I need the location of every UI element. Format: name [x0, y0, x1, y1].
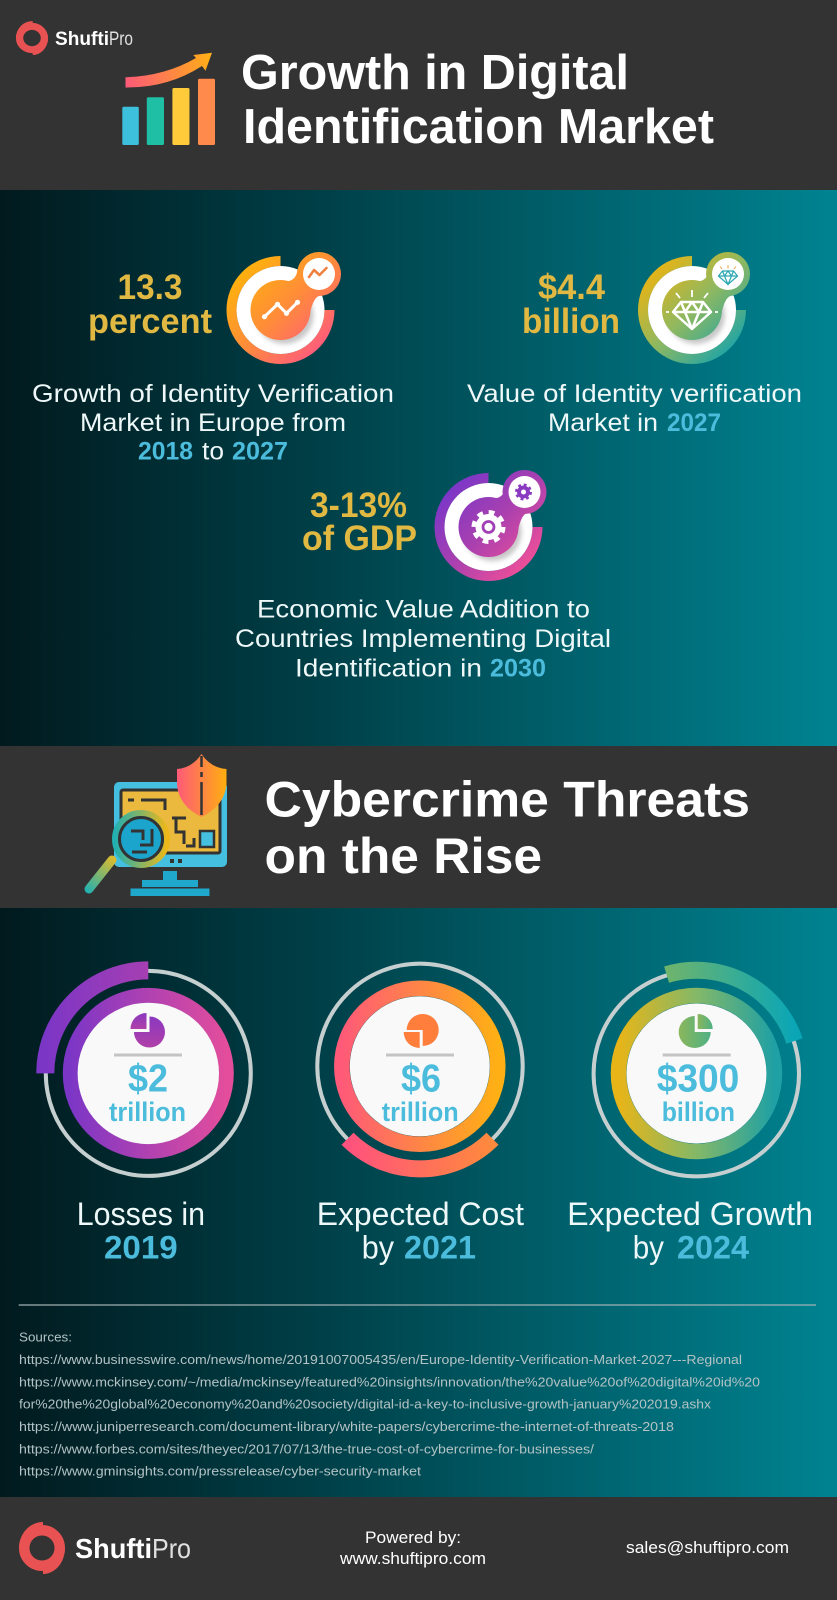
- text: growth description: 2027: [232, 438, 288, 466]
- icon: monitor with shield and magnifier: [89, 754, 227, 896]
- text block: sources: https://www.mckinsey.com/~/media/mckinsey/featured%20insights/innovation/the%20value%20of%20digital%20id%20: [19, 1374, 760, 1389]
- stat: 3-13% of GDP: of GDP: [302, 519, 417, 558]
- text: value description: Market in: [548, 409, 658, 437]
- title: Growth in Digital Identification Market: [241, 46, 714, 154]
- text: growth description: to: [202, 438, 224, 466]
- title: Cybercrime Threats on the Rise: on the Rise: [264, 828, 542, 884]
- stat ring: $300 billion: [594, 970, 799, 1176]
- text: value description: 2027: [667, 409, 721, 437]
- panel: gradient background growth section: [0, 190, 837, 746]
- label: Expected Cost by 2021: Expected Cost: [317, 1196, 524, 1232]
- text block: sources: https://www.forbes.com/sites/theyec/2017/07/13/the-true-cost-of-cybercrime-for-businesses/: [19, 1441, 594, 1456]
- stat ring: $6 trillion: trillion: [382, 1097, 459, 1127]
- stat: 13.3 percent: percent: [88, 302, 212, 341]
- icon: growth bar chart with arrow: [122, 53, 215, 145]
- text: value description: [467, 380, 802, 437]
- text: growth description: 2018: [138, 438, 193, 466]
- stat: 3-13% of GDP: [235, 470, 611, 682]
- logo: ShuftiPro small: Pro: [109, 29, 133, 50]
- label: Expected Cost by 2021: by: [362, 1229, 394, 1265]
- logo: ShuftiPro large: Pro: [152, 1533, 191, 1564]
- label: Losses in 2019: Losses in: [77, 1196, 205, 1232]
- icon: pie chart: [679, 1014, 713, 1048]
- text: GDP description: [235, 596, 611, 682]
- label: Expected Growth by 2024: 2024: [677, 1229, 749, 1265]
- stat ring: $300 billion: $300: [657, 1058, 739, 1101]
- label: Expected Growth by 2024: by: [633, 1229, 664, 1265]
- stat: 3-13% of GDP: 3-13%: [310, 486, 407, 525]
- stat ring: $6 trillion: $6: [401, 1058, 441, 1101]
- icon: pie chart: [404, 1014, 439, 1048]
- text block: sources: https://www.businesswire.com/news/home/20191007005435/en/Europe-Identity-Verification-Market-2027---Regional: [19, 1352, 742, 1367]
- text: growth description: Growth of Identity Verification: [32, 380, 394, 408]
- logo: ShuftiPro large: Shufti: [75, 1533, 152, 1564]
- panel: cybercrime header: [0, 746, 837, 908]
- text: growth description: Market in Europe from: [80, 409, 346, 437]
- stat ring: $2 trillion: [45, 970, 251, 1176]
- logo: ShuftiPro small: Shufti: [55, 29, 109, 50]
- title: Cybercrime Threats on the Rise: [264, 772, 750, 884]
- label: Expected Growth by 2024: Expected Growth: [567, 1196, 813, 1232]
- text: powered by: [339, 1528, 486, 1568]
- text block: sources: [19, 1330, 760, 1479]
- label: Expected Growth by 2024: [567, 1196, 813, 1265]
- stat ring: $300 billion: billion: [662, 1097, 735, 1127]
- stat ring: $2 trillion: $2: [128, 1058, 168, 1101]
- stat: $4.4 billion: $4.4: [538, 268, 606, 307]
- text block: sources: Sources:: [19, 1330, 72, 1345]
- icon: line chart badge: [232, 252, 341, 359]
- text block: sources: https://www.juniperresearch.com/document-library/white-papers/cybercrime-the-internet-of-threats-2018: [19, 1419, 674, 1434]
- stat: $4.4 billion: [467, 252, 802, 437]
- text: GDP description: Economic Value Addition to: [257, 596, 590, 624]
- text block: sources: for%20the%20global%20economy%20and%20society/digital-id-a-key-to-inclusive-growth-january%202019.ashx: [19, 1397, 712, 1412]
- logo: ShuftiPro large: [19, 1522, 191, 1574]
- text block: sources: https://www.gminsights.com/pressrelease/cyber-security-market: [19, 1464, 421, 1479]
- icon: diamond badge: [643, 252, 750, 359]
- title: Cybercrime Threats on the Rise: Cybercrime Threats: [264, 772, 750, 828]
- text: value description: Value of Identity verification: [467, 380, 802, 408]
- text: powered by: Powered by:: [365, 1528, 461, 1547]
- icon: gear badge: [440, 470, 546, 576]
- icon: pie chart: [130, 1013, 165, 1048]
- label: Expected Cost by 2021: 2021: [404, 1229, 476, 1265]
- logo: ShuftiPro small: [16, 21, 133, 55]
- text: contact email: sales@shuftipro.com: [626, 1538, 789, 1557]
- label: Losses in 2019: 2019: [104, 1229, 178, 1265]
- text: GDP description: Countries Implementing Digital: [235, 625, 611, 653]
- stat ring: $2 trillion: trillion: [109, 1097, 186, 1127]
- text: powered by: www.shuftipro.com: [339, 1549, 486, 1568]
- label: Expected Cost by 2021: [317, 1196, 524, 1265]
- stat: 13.3 percent: 13.3: [118, 268, 182, 307]
- panel: footer: [0, 1497, 837, 1600]
- text: GDP description: 2030: [490, 654, 546, 682]
- panel: gradient background cybercrime section: [0, 908, 837, 1497]
- stat ring: $6 trillion: [317, 964, 523, 1169]
- label: Losses in 2019: [77, 1196, 205, 1265]
- title: Growth in Digital Identification Market: Identification Market: [243, 100, 714, 154]
- text: GDP description: Identification in: [295, 654, 482, 682]
- title: Growth in Digital Identification Market: Growth in Digital: [241, 46, 629, 100]
- text: growth description: [32, 380, 394, 466]
- panel: top header: [0, 0, 837, 190]
- stat: 13.3 percent: [32, 252, 394, 466]
- stat: $4.4 billion: billion: [522, 302, 620, 341]
